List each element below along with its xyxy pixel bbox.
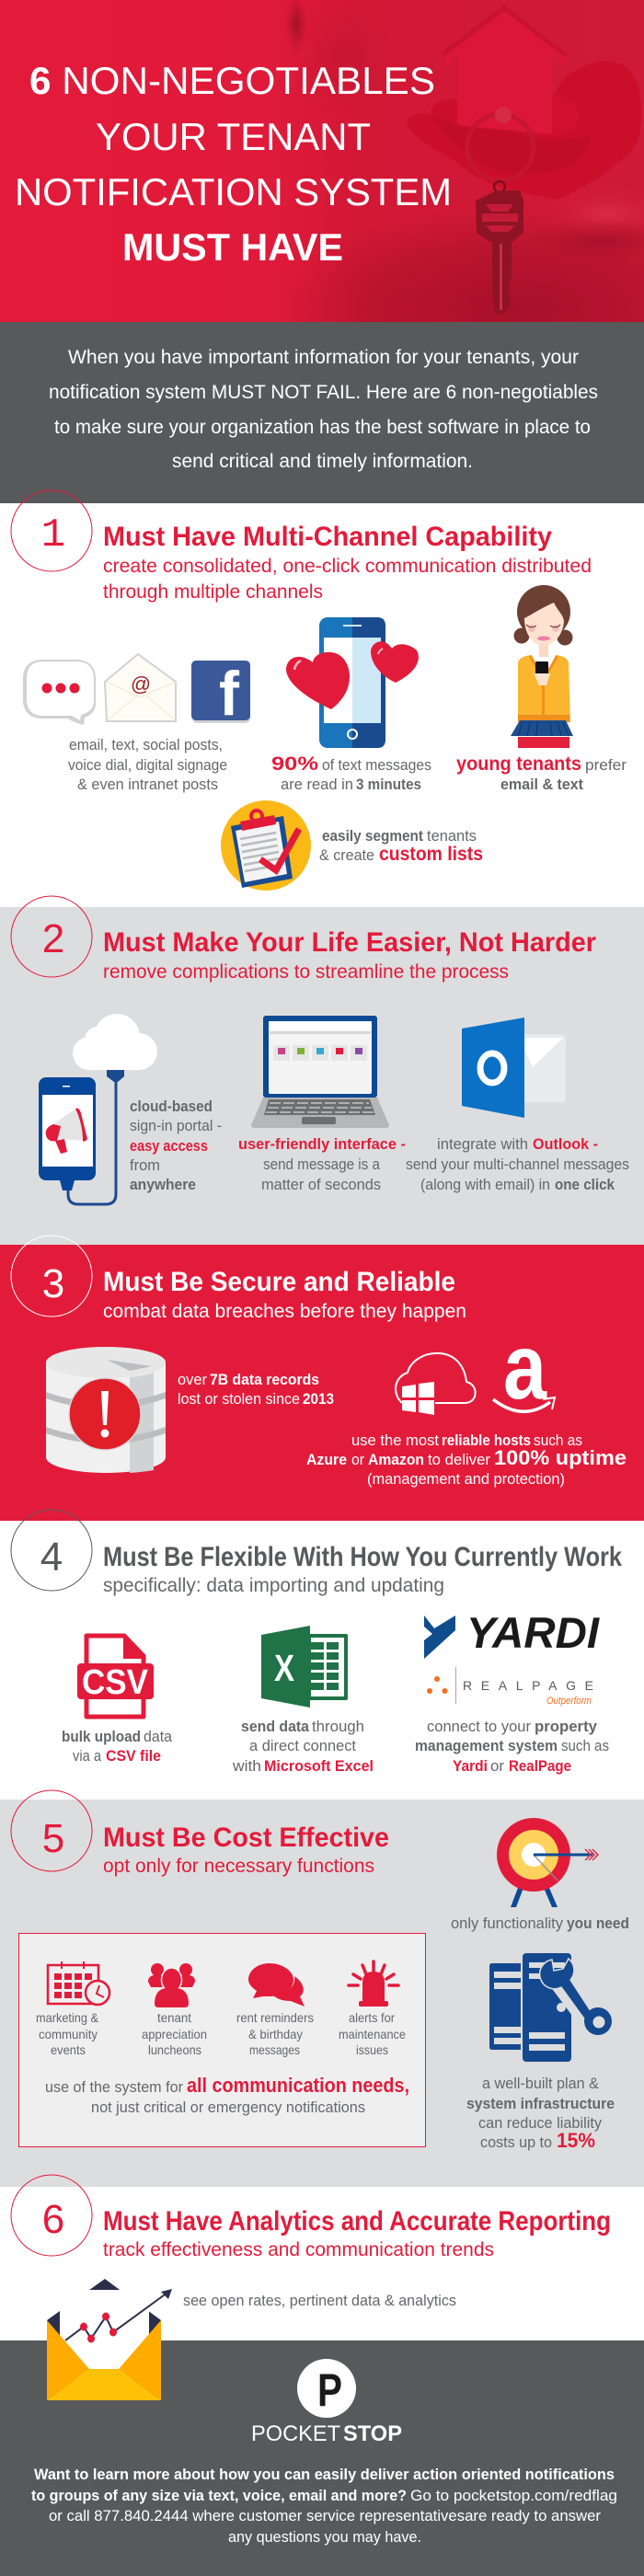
caption: reliable hosts: Amazon (368, 1451, 424, 1468)
heading 2: remove complications to streamline the process (103, 961, 509, 983)
caption: infrastructure: 15% (557, 2129, 595, 2152)
icon: csv file (77, 1634, 154, 1717)
caption: cloud-based: easy access (130, 1137, 208, 1155)
caption: outlook (406, 1135, 629, 1193)
caption: alerts: maintenance (339, 2027, 406, 2041)
caption: text stat: of text messages (322, 756, 431, 774)
caption: infrastructure: system infrastructure (466, 2095, 615, 2112)
caption: user-friendly (238, 1135, 406, 1193)
number badge 5: 5 (42, 1816, 64, 1861)
number badge 4 (11, 1510, 92, 1591)
icon: azure cloud (396, 1353, 476, 1415)
title: NOTIFICATION SYSTEM (15, 170, 452, 213)
caption: data records (178, 1371, 334, 1408)
heading 3 (103, 1267, 466, 1322)
caption: all communication needs: all communication needs, (187, 2074, 409, 2097)
panel: section 1 multi-channel (0, 490, 644, 907)
intro panel (0, 322, 644, 503)
caption: outlook: (along with email) in (420, 1176, 550, 1193)
caption: functionality: only functionality (451, 1915, 563, 1932)
caption: tenant appreciation (142, 2010, 207, 2057)
title: 6 NON-NEGOTIABLES (29, 59, 435, 102)
caption: custom lists: tenants (427, 827, 477, 845)
icon: hand holding house and key (407, 5, 641, 315)
call to action: or call 877.840.2444 where customer service representativesare ready to answer (49, 2507, 601, 2524)
caption: excel: a direct connect (249, 1737, 356, 1754)
caption: data records: over (178, 1371, 207, 1388)
caption: csv: CSV file (106, 1747, 161, 1765)
icon: email envelope: @ (131, 673, 151, 696)
caption: outlook: send your multi-channel messages (406, 1156, 629, 1173)
heading 2 (103, 927, 596, 983)
caption: outlook: Outlook - (533, 1135, 598, 1153)
caption: custom lists: custom lists (379, 844, 483, 865)
icon: facebook: f (219, 659, 239, 729)
number badge 5 (11, 1790, 92, 1871)
icon: excel: X (274, 1647, 294, 1689)
caption: user-friendly: user-friendly interface - (238, 1135, 406, 1153)
icon: envelope with rising chart (47, 2279, 172, 2400)
caption: csv: data (144, 1728, 173, 1745)
call to action (31, 2466, 617, 2546)
icon: young woman with phone (511, 585, 573, 748)
footer panel (0, 2340, 644, 2576)
caption: marketing (36, 2010, 99, 2057)
header panel (0, 0, 644, 322)
icon: email envelope (105, 654, 176, 721)
caption: all communication needs: use of the system for (45, 2078, 183, 2096)
caption: channels: email, text, social posts, (69, 736, 223, 753)
caption: csv (62, 1728, 173, 1765)
heading 5: Must Be Cost Effective (103, 1823, 389, 1853)
caption: cloud-based: anywhere (130, 1176, 196, 1193)
call to action: to groups of any size via text, voice, email and more? (31, 2487, 407, 2504)
caption: reliable hosts: Azure (306, 1451, 347, 1468)
caption: text stat: 90% (271, 753, 318, 775)
caption: excel: through (312, 1718, 364, 1735)
icon: alarm light (349, 1961, 398, 2007)
caption: rent reminders: messages (249, 2042, 300, 2057)
caption: cloud-based (130, 1098, 222, 1193)
caption: all communication needs (45, 2074, 409, 2116)
number badge 2 (11, 896, 92, 977)
panel: section 6 analytics (0, 2175, 644, 2340)
caption: text stat: are read in (281, 776, 353, 793)
heading 1: create consolidated, one-click communication distributed (103, 556, 592, 577)
heading 1: through multiple channels (103, 581, 323, 603)
caption: text stat (271, 753, 431, 793)
caption: tenant appreciation: luncheons (148, 2042, 201, 2057)
icon: speech bubble (23, 660, 96, 725)
caption: reliable hosts: or (351, 1451, 364, 1468)
caption: young tenants: prefer (585, 756, 627, 774)
caption: reliable hosts: such as (534, 1432, 582, 1449)
heading 3: combat data breaches before they happen (103, 1301, 466, 1322)
caption: property management: RealPage (509, 1757, 571, 1775)
caption: cloud-based: from (130, 1156, 160, 1174)
caption: all communication needs: not just critical or emergency notifications (91, 2099, 365, 2116)
icon: cloud connected to phone (39, 1014, 157, 1204)
logo: realpage: REALPAGE (463, 1678, 593, 1693)
number badge 6 (11, 2175, 92, 2256)
caption: outlook: integrate with (437, 1135, 528, 1153)
heading 1: Must Have Multi-Channel Capability (103, 522, 552, 552)
caption: young tenants: young tenants (456, 753, 581, 775)
heading 3: Must Be Secure and Reliable (103, 1267, 455, 1297)
icon: servers with wrench (489, 1953, 612, 2062)
panel: section 3 secure and reliable (0, 1236, 644, 1521)
icon: excel (261, 1626, 348, 1708)
heading 6: track effectiveness and communication trends (103, 2239, 494, 2260)
panel: section 4 flexible (0, 1510, 644, 1800)
caption: reliable hosts (306, 1432, 627, 1488)
caption: custom lists: & create (319, 846, 374, 864)
logo: pocketstop: P (317, 2364, 342, 2416)
caption: marketing: community (39, 2027, 98, 2041)
caption: rent reminders (236, 2010, 314, 2057)
caption: user-friendly: matter of seconds (261, 1176, 381, 1193)
icon: clipboard with checkmark (221, 800, 311, 891)
caption: custom lists: easily segment (322, 827, 423, 845)
panel: communication uses box (18, 1934, 425, 2147)
caption: open rates: see open rates, pertinent data & analytics (183, 2292, 456, 2309)
caption: young tenants (456, 753, 627, 793)
panel: section 2 make life easier (0, 896, 644, 1245)
heading 6 (103, 2206, 611, 2260)
heading 4 (103, 1542, 622, 1596)
caption: alerts: alerts for (349, 2010, 395, 2025)
icon: laptop (251, 1016, 389, 1128)
caption: young tenants: email & text (500, 776, 583, 793)
number badge 2: 2 (42, 916, 64, 961)
caption: infrastructure: can reduce liability (478, 2114, 602, 2132)
heading 5 (103, 1823, 389, 1877)
caption: text stat: 3 minutes (356, 776, 421, 793)
caption: marketing: marketing & (36, 2010, 99, 2025)
number badge 1: 1 (41, 512, 65, 558)
caption: data records: 7B data records (210, 1371, 319, 1388)
caption: alerts (339, 2010, 406, 2057)
caption: functionality: you need (567, 1915, 629, 1932)
caption: rent reminders: rent reminders (236, 2010, 314, 2025)
caption: property management: Yardi (453, 1757, 488, 1775)
caption: cloud-based: sign-in portal - (130, 1117, 222, 1134)
number badge 3: 3 (42, 1261, 64, 1306)
caption: excel: Microsoft Excel (264, 1757, 374, 1775)
caption: csv: via a (73, 1747, 101, 1765)
caption: property management: connect to your (427, 1718, 531, 1735)
icon: calendar (48, 1961, 109, 2005)
call to action: Want to learn more about how you can easily deliver action oriented notifications (34, 2466, 615, 2483)
logo: realpage: Outperform (546, 1696, 592, 1707)
caption: data records: 2013 (303, 1390, 334, 1408)
heading 5: opt only for necessary functions (103, 1856, 374, 1877)
caption: reliable hosts: use the most (351, 1432, 439, 1449)
caption: reliable hosts: to deliver (428, 1451, 490, 1468)
caption: infrastructure (466, 2075, 615, 2152)
icon: csv file: CSV (82, 1663, 149, 1702)
caption: data records: lost or stolen since (178, 1390, 300, 1408)
caption: marketing: events (51, 2042, 86, 2057)
heading 1 (103, 522, 592, 603)
number badge 6: 6 (42, 2197, 64, 2242)
title: YOUR TENANT (96, 115, 371, 158)
caption: cloud-based: cloud-based (130, 1098, 213, 1115)
caption: excel: send data (241, 1718, 310, 1735)
intro panel: notification system MUST NOT FAIL. Here are 6 non-negotiables (49, 382, 598, 403)
title: MUST HAVE (122, 225, 343, 269)
logo: pocketstop (251, 2359, 402, 2446)
caption: tenant appreciation: appreciation (142, 2027, 207, 2041)
caption: property management: such as (561, 1737, 609, 1754)
caption: functionality (451, 1915, 629, 1932)
caption: property management (415, 1718, 609, 1775)
heading 4: specifically: data importing and updating (103, 1575, 444, 1596)
icon: amazon: a (503, 1316, 547, 1419)
icon: outlook (462, 1018, 566, 1118)
intro panel: to make sure your organization has the best software in place to (54, 417, 591, 438)
icon: database alert (46, 1347, 166, 1473)
number badge 4: 4 (40, 1535, 63, 1580)
panel: section 5 cost effective (0, 1790, 644, 2187)
caption: infrastructure: a well-built plan & (482, 2075, 600, 2092)
caption: custom lists (319, 827, 483, 865)
caption: rent reminders: & birthday (248, 2027, 303, 2041)
logo: pocketstop: STOP (343, 2421, 402, 2446)
call to action: Go to pocketstop.com/redflag (410, 2487, 617, 2504)
caption: reliable hosts: 100% uptime (494, 1446, 627, 1469)
logo: realpage (427, 1667, 593, 1707)
caption: channels (68, 736, 227, 793)
caption: alerts: issues (356, 2042, 388, 2057)
caption: channels: voice dial, digital signage (68, 756, 227, 774)
caption: infrastructure: costs up to (480, 2133, 552, 2151)
caption: property management: or (490, 1757, 504, 1775)
number badge 3 (11, 1236, 92, 1317)
heading 2: Must Make Your Life Easier, Not Harder (103, 927, 596, 958)
caption: excel (232, 1718, 374, 1775)
caption: outlook: one click (555, 1176, 615, 1193)
caption: property management: property (535, 1718, 598, 1735)
icon: phone with hearts (286, 617, 419, 748)
caption: tenant appreciation: tenant (157, 2010, 191, 2025)
intro panel: When you have important information for your tenants, your (68, 347, 579, 368)
number badge 1 (11, 490, 92, 571)
caption: excel: with (232, 1757, 261, 1775)
caption: reliable hosts: (management and protection) (367, 1470, 565, 1488)
icon: facebook (191, 659, 250, 729)
logo: pocketstop: POCKET (251, 2421, 340, 2446)
icon: target with arrow (497, 1818, 598, 1907)
caption: property management: management system (415, 1737, 558, 1754)
title (15, 59, 452, 269)
call to action: any questions you may have. (228, 2528, 421, 2546)
icon: people (148, 1963, 195, 2007)
caption: reliable hosts: reliable hosts (442, 1432, 531, 1449)
caption: channels: & even intranet posts (77, 776, 218, 793)
intro panel: send critical and timely information. (172, 451, 473, 472)
caption: csv: bulk upload (62, 1728, 141, 1745)
caption: user-friendly: send message is a (263, 1156, 380, 1173)
icon: chat bubbles (248, 1963, 305, 2007)
logo: yardi: YARDI (466, 1608, 600, 1657)
